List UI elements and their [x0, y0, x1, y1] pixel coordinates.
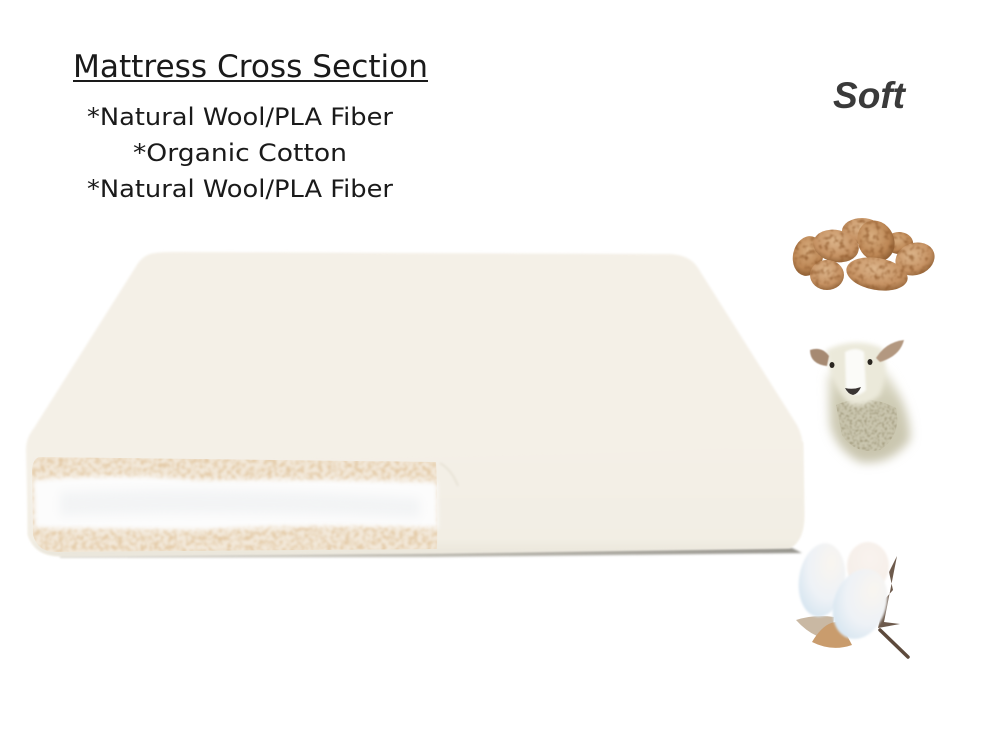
husk [796, 616, 834, 640]
sheep fleece texture [836, 399, 897, 451]
layer list text: *Organic Cotton [133, 139, 347, 167]
sheep face blaze [845, 349, 866, 395]
sheep left ear [810, 349, 829, 366]
icon: sheep [810, 340, 910, 463]
cotton core shading [60, 490, 420, 518]
cotton core [33, 476, 438, 530]
sheep eyes [830, 359, 872, 368]
calyx [878, 556, 900, 628]
title: Mattress Cross Section [73, 49, 428, 85]
soft label: Soft [833, 75, 907, 116]
layer list text: *Natural Wool/PLA Fiber [87, 103, 393, 131]
cross section cutaway [32, 457, 438, 552]
bolls [794, 540, 850, 620]
mattress [26, 252, 804, 558]
sheep right ear [876, 340, 904, 362]
wool layers [32, 457, 437, 552]
mattress body [26, 252, 804, 556]
mattress front side [28, 442, 804, 556]
mattress shadow [60, 547, 802, 558]
icon: potatoes [789, 214, 939, 295]
sheep nose [845, 387, 861, 395]
sheep neck and fleece [828, 367, 910, 463]
sheep head [826, 342, 886, 405]
icon: cotton boll [794, 540, 908, 657]
layer list text: *Natural Wool/PLA Fiber [87, 175, 393, 203]
fabric fold [440, 463, 458, 486]
layer list text [87, 103, 393, 203]
stem [880, 630, 908, 657]
